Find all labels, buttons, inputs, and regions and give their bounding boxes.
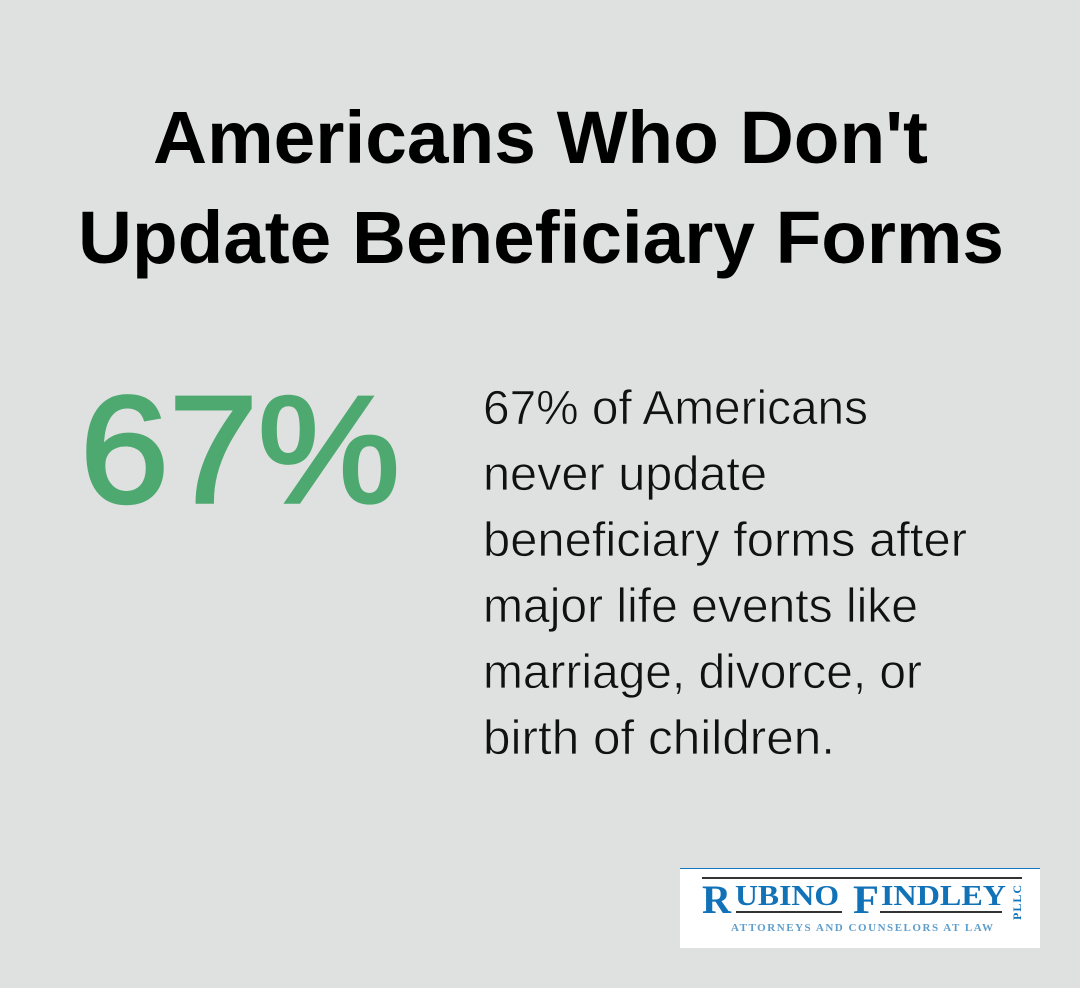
logo: Rubino Findley PLLC: PLLC: [1010, 885, 1024, 920]
logo: Rubino Findley PLLC: [680, 868, 1040, 948]
description text: never update: [483, 448, 767, 501]
title: [78, 96, 1004, 279]
big statistic: 67%: 67%: [80, 365, 400, 535]
description text: [483, 382, 967, 765]
logo: Rubino Findley PLLC: F: [853, 877, 879, 922]
description text: 67% of Americans: [483, 382, 868, 435]
logo: Rubino Findley PLLC: UBINO: [735, 881, 839, 912]
description text: marriage, divorce, or: [483, 646, 922, 699]
description text: major life events like: [483, 580, 918, 633]
logo: Rubino Findley PLLC: ATTORNEYS AND COUNSELORS AT LAW: [731, 922, 993, 934]
title: Americans Who Don't: [153, 96, 928, 179]
description text: beneficiary forms after: [483, 514, 967, 567]
logo: Rubino Findley PLLC: R: [702, 877, 732, 922]
description text: birth of children.: [483, 712, 835, 765]
logo: Rubino Findley PLLC: INDLEY: [881, 881, 1006, 912]
title: Update Beneficiary Forms: [78, 196, 1004, 279]
